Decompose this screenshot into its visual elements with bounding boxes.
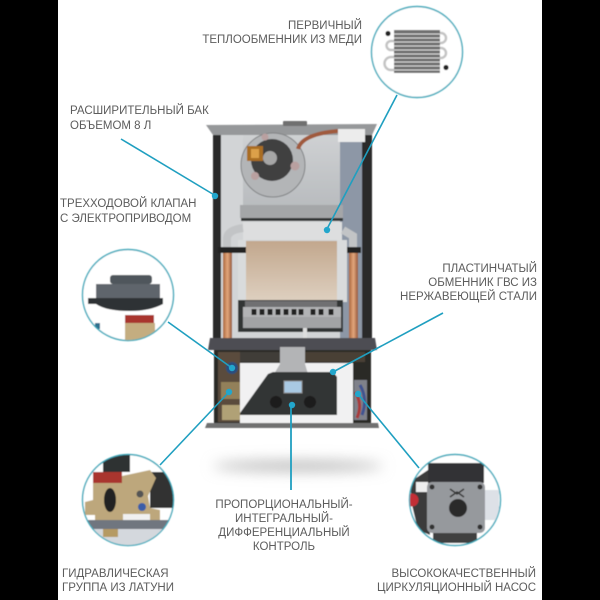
label: hydraulic group: ГИДРАВЛИЧЕСКАЯ (62, 568, 169, 580)
dark motor (150, 472, 174, 508)
left copper pipe (223, 248, 232, 340)
label: PID control: КОНТРОЛЬ (253, 541, 315, 553)
fan coil (247, 146, 263, 161)
label: PID control: ПРОПОРЦИОНАЛЬНЫЙ- (215, 498, 353, 511)
leader line: control (289, 402, 295, 490)
blue plug (138, 503, 146, 511)
label: three-way valve: ТРЕХХОДОВОЙ КЛАПАН (60, 197, 196, 210)
corner screws (430, 484, 434, 490)
central rod (303, 328, 307, 340)
chamber left wall (238, 240, 246, 302)
grey rail (85, 520, 175, 529)
right mount (484, 490, 499, 520)
actuator cap (110, 275, 152, 284)
red valve (406, 494, 418, 506)
red collar (93, 472, 122, 483)
brass stem (125, 323, 155, 343)
shelf (208, 338, 377, 350)
left dark area (410, 470, 430, 535)
return bends (384, 33, 446, 70)
upper wiring (240, 352, 280, 362)
bottom edge (205, 423, 379, 428)
inset: copper heat exchanger (372, 6, 462, 98)
left side strip (213, 135, 221, 342)
white fitting (416, 482, 428, 492)
right inner panel (340, 135, 362, 342)
copper tube (298, 131, 338, 149)
dark top casing (428, 463, 484, 483)
gauge (136, 490, 144, 498)
boiler unit (205, 121, 379, 428)
inset: hydraulic group (82, 454, 175, 546)
pipe clamps (218, 247, 246, 253)
label: plate exchanger: ПЛАСТИНЧАТЫЙ (442, 262, 537, 275)
label: PID control: ДИФФЕРЕНЦИАЛЬНЫЙ (218, 526, 350, 539)
lower fittings (94, 528, 162, 546)
heat exchanger (243, 222, 342, 240)
boiler top lid (206, 124, 377, 135)
fan disc (241, 133, 305, 197)
fan plate (243, 135, 340, 205)
flue collar (283, 121, 307, 126)
leader line: three-way valve (168, 322, 235, 371)
label: hydraulic group: ГРУППА ИЗ ЛАТУНИ (62, 582, 174, 594)
white connector (338, 129, 365, 142)
white panel (240, 363, 353, 425)
coil (104, 488, 116, 512)
label: PID control: ИНТЕГРАЛЬНЫЙ- (235, 512, 333, 525)
right knob (304, 396, 316, 408)
floor shadow (213, 461, 383, 471)
exchanger fins (394, 30, 440, 73)
label: primary copper heat exchanger: ПЕРВИЧНЫЙ (288, 19, 362, 32)
label: circulation pump: ЦИРКУЛЯЦИОННЫЙ НАСОС (377, 581, 536, 594)
inset: circulation pump (406, 454, 500, 546)
leader line: plate exchanger (330, 313, 443, 375)
leader line: hydraulic group (160, 389, 232, 465)
chamber right wall (337, 240, 347, 302)
control panel (240, 372, 337, 415)
left knob (270, 396, 282, 408)
label: plate exchanger: НЕРЖАВЕЮЩЕЙ СТАЛИ (400, 290, 537, 303)
black cap (103, 455, 130, 472)
right copper pipe (349, 248, 358, 340)
pipe ends (385, 31, 391, 36)
combustion chamber (246, 241, 337, 301)
leader line: pump (355, 391, 419, 468)
base (433, 533, 477, 543)
label: expansion tank: РАСШИРИТЕЛЬНЫЙ БАК (70, 104, 209, 117)
label: primary copper heat exchanger: ТЕПЛООБМЕННИК ИЗ МЕДИ (202, 34, 362, 46)
bracket (274, 347, 308, 374)
left components (218, 352, 240, 422)
actuator band (88, 298, 163, 311)
label: circulation pump: ВЫСОКОКАЧЕСТВЕННЫЙ (391, 567, 536, 580)
brass body (85, 470, 160, 522)
label: expansion tank: ОБЪЕМОМ 8 Л (70, 120, 151, 132)
leader line: heat exchanger (324, 95, 397, 233)
burner slots (254, 309, 331, 315)
white block (123, 514, 150, 520)
inset: three-way valve (82, 250, 174, 343)
right side strip (362, 135, 372, 342)
pipe elbows (227, 228, 243, 248)
pump body (427, 482, 485, 533)
label: three-way valve: С ЭЛЕКТРОПРИВОДОМ (60, 213, 191, 225)
centre screw (449, 499, 467, 517)
actuator body (96, 284, 160, 300)
right wiring (354, 380, 367, 420)
brand mark (450, 489, 464, 497)
leader line: expansion tank (121, 139, 218, 199)
boiler upper back (213, 132, 372, 342)
label: plate exchanger: ОБМЕННИК ГВС ИЗ (428, 277, 537, 289)
display screen (284, 381, 302, 393)
hood (240, 205, 343, 218)
fan assembly (241, 133, 305, 197)
red collar (125, 315, 154, 323)
lower compartment (214, 350, 371, 425)
burner (238, 300, 343, 332)
